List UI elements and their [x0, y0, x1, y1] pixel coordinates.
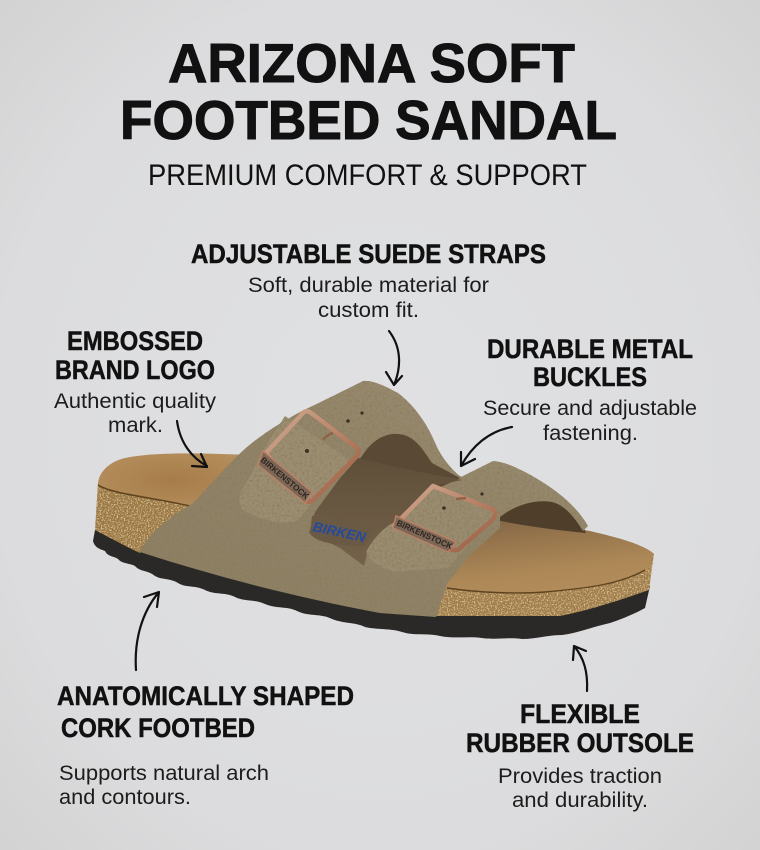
callout: durable metal buckles: Secure and adjustable	[483, 397, 697, 420]
arrow: to brand logo	[177, 421, 207, 467]
callout: flexible rubber outsole: FLEXIBLE	[520, 699, 640, 729]
arrow: to straps	[386, 331, 402, 385]
buckle 1: BIRKENSTOCK	[259, 455, 312, 502]
callout: embossed brand logo: Authentic quality	[54, 390, 217, 413]
strap 2 tab	[366, 485, 495, 572]
buckle 1	[258, 411, 364, 503]
inner brand logo: BIRKEN	[311, 518, 368, 545]
strap holes	[442, 492, 484, 510]
heel rim line	[98, 485, 190, 506]
callout: flexible rubber outsole: Provides traction	[498, 765, 662, 788]
buckle 2: BIRKENSTOCK	[395, 518, 455, 552]
callout: adjustable suede straps: Soft, durable material for	[248, 274, 489, 297]
heel footbed	[98, 453, 250, 507]
callout: adjustable suede straps	[191, 239, 546, 322]
callout: durable metal buckles: fastening.	[543, 422, 638, 445]
callout: embossed brand logo: mark.	[108, 414, 163, 437]
callout: anatomically shaped cork footbed: Supports natural arch	[59, 762, 269, 785]
callout: flexible rubber outsole	[466, 699, 694, 812]
callout: embossed brand logo	[54, 326, 217, 437]
callout: anatomically shaped cork footbed: ANATOMICALLY SHAPED	[57, 681, 354, 711]
front cork side	[430, 553, 654, 616]
buckle plate	[393, 516, 456, 552]
callout: adjustable suede straps: custom fit.	[318, 299, 419, 322]
strap 2 cave	[496, 497, 586, 533]
buckle 2	[393, 486, 495, 552]
callout: embossed brand logo: EMBOSSED	[67, 326, 203, 356]
buckle plate	[258, 451, 312, 503]
subtitle: PREMIUM COMFORT & SUPPORT	[148, 159, 587, 192]
callout: durable metal buckles: DURABLE METAL	[487, 334, 693, 364]
callout: flexible rubber outsole: RUBBER OUTSOLE	[466, 728, 694, 758]
title: ARIZONA SOFT	[168, 32, 575, 94]
heel cork side	[95, 483, 195, 553]
callout: embossed brand logo: BRAND LOGO	[55, 355, 215, 385]
rubber outsole	[93, 530, 650, 639]
callout: anatomically shaped cork footbed	[57, 681, 354, 809]
strap holes	[305, 411, 364, 453]
buckle pin	[456, 498, 466, 499]
inner cave	[352, 434, 460, 492]
logo patch	[310, 515, 376, 546]
arrow: to buckles	[461, 427, 512, 466]
title	[120, 32, 617, 151]
buckle frame	[394, 486, 495, 550]
buckle frame	[266, 411, 359, 502]
strap 1 tab	[239, 416, 350, 523]
arrow: to rubber outsole	[573, 646, 587, 691]
callout: flexible rubber outsole: and durability.	[512, 789, 648, 812]
buckle pin	[323, 433, 333, 440]
sandal illustration	[93, 381, 654, 639]
callout: durable metal buckles: BUCKLES	[533, 362, 647, 392]
callout: adjustable suede straps: ADJUSTABLE SUEDE STRAPS	[191, 239, 546, 269]
suede upper silhouette	[140, 381, 588, 617]
inner footbed	[309, 458, 462, 566]
callout: anatomically shaped cork footbed: and contours.	[59, 786, 191, 809]
callout: anatomically shaped cork footbed: CORK FOOTBED	[61, 713, 255, 743]
arrow: to cork footbed	[136, 592, 159, 670]
strap cave shadow	[350, 430, 470, 530]
front rim line	[447, 570, 645, 593]
callout: durable metal buckles	[483, 334, 697, 445]
title: FOOTBED SANDAL	[120, 89, 617, 151]
front footbed	[425, 508, 654, 599]
